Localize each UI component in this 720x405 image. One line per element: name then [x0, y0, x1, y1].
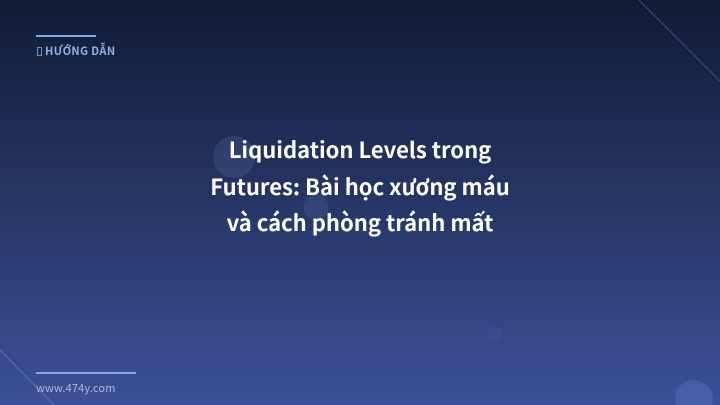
icon: missing glyph box: [37, 47, 42, 56]
title: Liquidation Levels trong: [229, 133, 491, 165]
category label: HƯỚNG DẪN: [45, 43, 115, 59]
top accent line: [36, 35, 96, 37]
title: Futures: Bài học xương máu: [210, 170, 510, 202]
title: và cách phòng tránh mất: [227, 206, 493, 238]
bottom accent line: [36, 372, 136, 374]
title: [210, 133, 510, 238]
website url: www.474y.com: [36, 380, 116, 396]
